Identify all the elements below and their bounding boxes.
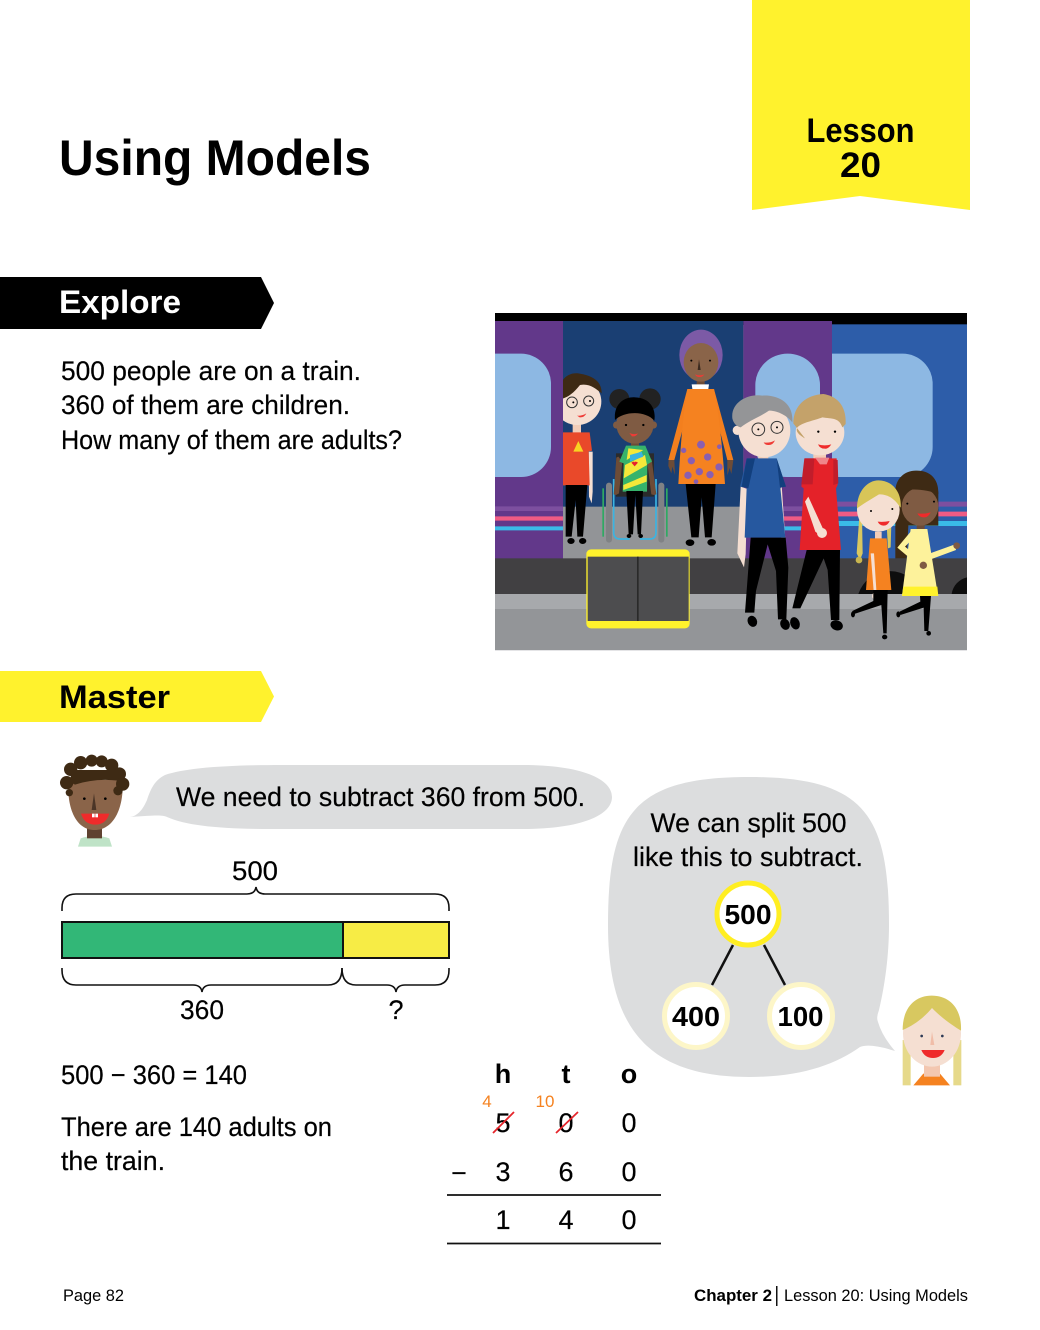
column subtraction <box>447 1059 661 1244</box>
bar: yellow unknown <box>343 922 449 958</box>
person: woman in purple headscarf <box>668 330 733 546</box>
explore problem text: How many of them are adults? <box>61 425 402 455</box>
person: man in red shirt <box>788 394 846 632</box>
icon: blonde girl face <box>903 996 961 1085</box>
person: girl in wheelchair <box>602 388 668 543</box>
regrouping digits <box>482 1092 554 1111</box>
answer sentence: There are 140 adults on <box>61 1112 332 1142</box>
label: question mark: ? <box>388 995 404 1025</box>
circle: 100: 100 <box>778 1001 824 1032</box>
bottom brace: unknown <box>342 968 449 992</box>
person: grandmother <box>732 395 792 631</box>
bar: green 360 <box>62 922 343 958</box>
footer: chapter reference <box>694 1286 968 1306</box>
row: 360: 6 <box>558 1157 574 1187</box>
person: brown haired girl <box>895 471 960 636</box>
column headers: o <box>621 1059 637 1089</box>
row: 360: 3 <box>495 1157 511 1187</box>
explore problem text: 360 of them are children. <box>61 390 350 420</box>
person: blonde girl <box>851 480 901 639</box>
column headers: h <box>495 1059 511 1089</box>
train illustration <box>495 313 967 650</box>
row: 140: 0 <box>621 1205 637 1235</box>
speech bubble: boy: We need to subtract 360 from 500. <box>176 782 585 812</box>
answer sentence <box>61 1112 332 1176</box>
row: 500: 0 <box>558 1108 574 1138</box>
explore problem text <box>61 356 402 455</box>
regrouping digits: 4 <box>482 1092 492 1111</box>
ramp <box>586 549 690 628</box>
regrouping digits: 10 <box>536 1092 554 1111</box>
row: 500: 5 <box>495 1108 511 1138</box>
column headers <box>495 1059 637 1089</box>
lesson ribbon: Lesson <box>806 112 914 150</box>
label: 360: 360 <box>180 995 224 1025</box>
master heading <box>0 671 274 722</box>
circle: 100 <box>770 984 832 1048</box>
speech bubble: number bond: We can split 500 <box>650 808 846 838</box>
explore heading <box>0 277 274 329</box>
circle: 500 <box>717 883 779 945</box>
row: 140: 1 <box>495 1205 511 1235</box>
circle: 400 <box>664 984 728 1048</box>
circle: 400: 400 <box>672 1001 720 1032</box>
label: 500: 500 <box>232 856 278 886</box>
equation: 500 − 360 = 140 <box>61 1060 247 1090</box>
title: Using Models <box>59 130 371 186</box>
speech bubble: number bond <box>608 777 895 1077</box>
explore heading: Explore <box>59 284 181 320</box>
bottom brace: 360 <box>62 968 342 992</box>
footer: page number: Page 82 <box>63 1286 124 1305</box>
speech bubble: number bond: like this to subtract. <box>633 842 863 872</box>
bar model <box>62 856 449 1025</box>
master heading: Master <box>59 679 170 715</box>
lesson ribbon <box>752 0 970 210</box>
row: 360: – <box>452 1156 466 1186</box>
row: 500 <box>495 1108 637 1138</box>
footer: chapter reference: Lesson 20: Using Models <box>784 1286 968 1305</box>
answer sentence: the train. <box>61 1146 165 1176</box>
speech bubble: boy <box>130 765 612 829</box>
row: 360 <box>452 1156 637 1187</box>
red crossings <box>493 1112 578 1133</box>
circle: 500: 500 <box>724 899 772 930</box>
footer: chapter reference: Chapter 2 <box>694 1286 772 1305</box>
explore problem text: 500 people are on a train. <box>61 356 361 386</box>
row: 360: 0 <box>621 1157 637 1187</box>
column headers: t <box>562 1059 570 1089</box>
connector lines <box>712 945 785 985</box>
top brace <box>62 887 449 911</box>
icon: boy face <box>60 755 129 847</box>
row: 140: 4 <box>558 1205 574 1235</box>
row: 140 <box>495 1205 637 1235</box>
person: child with glasses <box>563 373 602 544</box>
lesson ribbon: 20 <box>840 146 881 185</box>
row: 500: 0 <box>621 1108 637 1138</box>
